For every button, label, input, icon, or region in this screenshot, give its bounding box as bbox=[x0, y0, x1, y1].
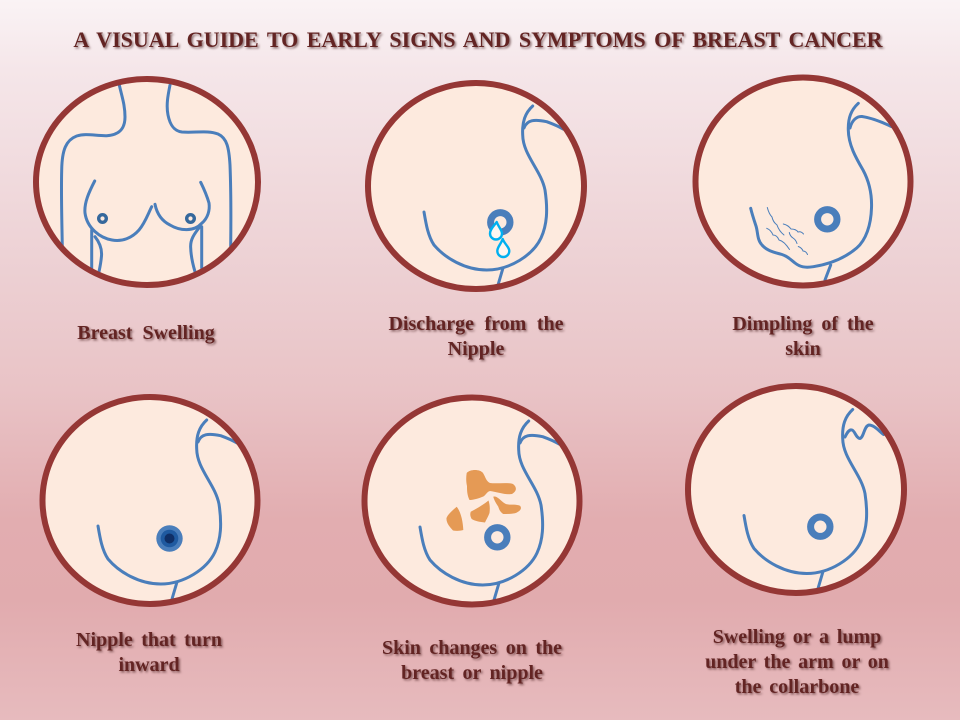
icon: inverted nipple bbox=[156, 525, 183, 552]
panel: dimpling illustration bbox=[696, 78, 910, 286]
label: nipple inward: Nipple that turn bbox=[76, 629, 222, 651]
label: skin changes bbox=[382, 637, 564, 686]
label: nipple inward bbox=[76, 629, 224, 676]
icon: water drops bbox=[490, 222, 509, 257]
label: dimpling: Dimpling of the bbox=[732, 313, 874, 335]
icon: orange skin patches bbox=[446, 470, 521, 531]
label: swelling or lump: Swelling or a lump bbox=[713, 626, 881, 648]
title: A VISUAL GUIDE TO EARLY SIGNS AND SYMPTOMS OF BREAST CANCER bbox=[73, 27, 883, 52]
skin wrinkles bbox=[767, 208, 808, 254]
label: swelling or lump: the collarbone bbox=[735, 676, 859, 698]
label: dimpling: skin bbox=[785, 338, 821, 360]
label: dimpling bbox=[732, 313, 876, 360]
label: skin changes: Skin changes on the bbox=[382, 637, 562, 659]
label: swelling or lump bbox=[705, 626, 891, 698]
icon: collarbone lump bbox=[845, 425, 884, 438]
panel: lump illustration bbox=[688, 386, 904, 593]
panel: discharge illustration bbox=[368, 83, 584, 289]
panel: inverted nipple illustration bbox=[42, 397, 258, 604]
panel: breast swelling illustration bbox=[36, 79, 258, 285]
label: swelling or lump: under the arm or on bbox=[705, 651, 889, 673]
label: discharge bbox=[388, 313, 566, 362]
label: nipple inward: inward bbox=[118, 654, 180, 676]
label: discharge: Nipple bbox=[448, 338, 504, 360]
panel: skin changes illustration bbox=[364, 398, 580, 604]
label: skin changes: breast or nipple bbox=[401, 662, 543, 684]
label: discharge: Discharge from the bbox=[388, 313, 564, 335]
label: breast swelling: Breast Swelling bbox=[77, 322, 215, 344]
